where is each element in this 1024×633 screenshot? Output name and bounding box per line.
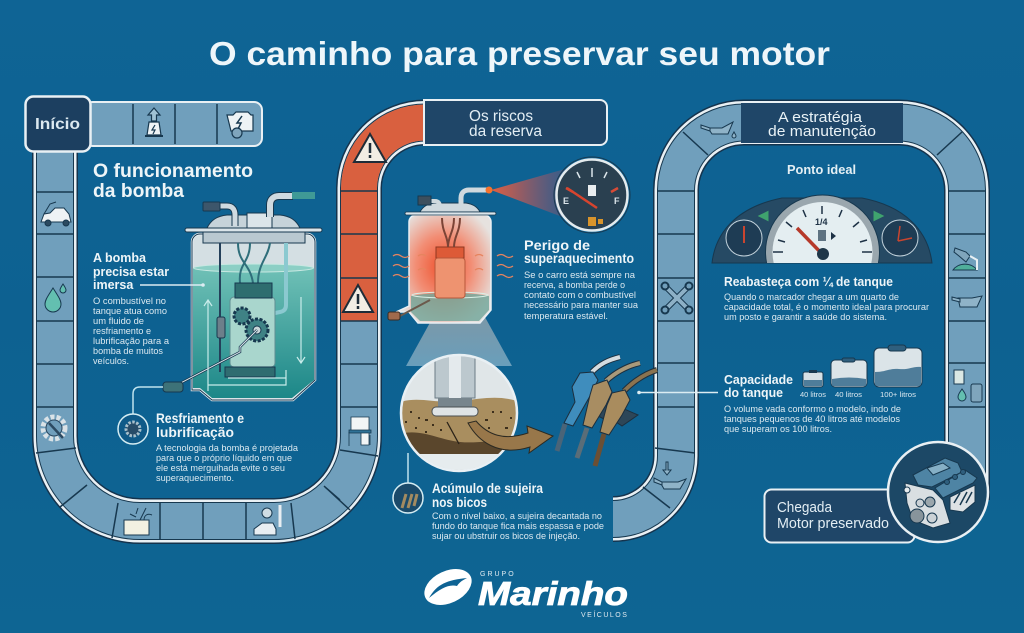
text block: Reabasteça com ¼ de tanque: um posto e garantir a saúde do sistema.	[724, 312, 887, 323]
icon: mechanic	[254, 505, 280, 535]
heading: Ponto ideal: Ponto ideal	[787, 162, 856, 177]
text block: Capacidade do tanque: tanques pequenos de 40 litros até modelos	[724, 414, 900, 425]
icon: fuel nozzles	[557, 357, 657, 466]
text block: Capacidade do tanque: que superam os 100 litros.	[724, 424, 832, 435]
text block: Capacidade do tanque: Capacidade	[724, 372, 793, 387]
text block: A bomba precisa estar imersa: bomba de muitos	[93, 346, 163, 357]
text block: Capacidade do tanque: 40 litros	[835, 392, 863, 399]
text block: Perigo de superaquecimento	[524, 238, 639, 322]
logo: Grupo Marinho Veículos	[419, 562, 628, 619]
text block: Perigo de superaquecimento: Se o carro está sempre na	[524, 270, 636, 281]
icon: oil can with arrow	[654, 462, 686, 489]
logo: Grupo Marinho Veículos: Marinho	[478, 575, 628, 612]
icon: water drops	[45, 284, 66, 312]
text block: A bomba precisa estar imersa: resfriamento e	[93, 326, 151, 337]
callout icon: dirty nozzles	[393, 453, 423, 513]
text block: A bomba precisa estar imersa: lubrificação para a	[93, 336, 170, 347]
icon: warning triangle lower	[343, 285, 373, 312]
text block: A bomba precisa estar imersa: tanque atua como	[93, 306, 167, 317]
icon: gear with wrench	[43, 417, 65, 439]
icon: fuel gauge: F	[614, 196, 620, 206]
text block: Acúmulo de sujeira nos bicos: Acúmulo de sujeira	[432, 481, 543, 496]
icon: nozzle on green dome	[953, 248, 977, 270]
text block: A bomba precisa estar imersa: veículos.	[93, 356, 129, 367]
text block: Reabasteça com ¼ de tanque: Quando o marcador chegar a um quarto de	[724, 292, 899, 303]
header: A estrategia de manutencao	[741, 103, 903, 143]
text block: Resfriamento e lubrificação	[156, 410, 299, 484]
text block: A bomba precisa estar imersa: imersa	[93, 278, 134, 292]
text block: Perigo de superaquecimento: contato com o combustível	[524, 290, 636, 301]
text block: Perigo de superaquecimento: necessário para manter sua	[524, 300, 639, 311]
text block: Capacidade do tanque: O volume vada conformo o modelo, indo de	[724, 404, 901, 415]
icon: fuel gauge	[554, 157, 630, 233]
heading: O funcionamento da bomba	[93, 160, 253, 202]
heading: O funcionamento da bomba: da bomba	[93, 180, 184, 202]
icon: engine gear	[227, 112, 253, 138]
title: O caminho para preservar seu motor	[209, 35, 830, 72]
icon: oil can right	[952, 296, 982, 307]
text block: A bomba precisa estar imersa	[93, 251, 170, 367]
text block: Acúmulo de sujeira nos bicos	[432, 481, 604, 542]
icon: small tank	[803, 370, 823, 387]
icon: warning triangle top	[354, 134, 386, 162]
start badge: Início: Início	[35, 116, 80, 133]
text block: Acúmulo de sujeira nos bicos: fundo do tanque fica mais espassa e pode	[432, 521, 604, 532]
text block: Reabasteça com ¼ de tanque: Reabasteça com ¼ de tanque	[724, 274, 893, 289]
beam: tank to injector circle	[406, 290, 512, 366]
header: Os riscos da reserva: da reserva	[469, 123, 542, 140]
top bar: start strip	[85, 102, 262, 146]
text block: Capacidade do tanque: 40 litros	[800, 392, 827, 399]
text block: Perigo de superaquecimento: superaquecimento	[524, 251, 634, 266]
text block: A bomba precisa estar imersa: A bomba	[93, 251, 147, 265]
icon: pump part	[349, 417, 371, 446]
text block: Resfriamento e lubrificação: Resfriamento e	[156, 410, 244, 426]
icon: fuel gauge: E	[563, 196, 569, 206]
finish badge: Chegada Motor preservado	[764, 490, 914, 542]
illustration: dashboard gauge: 1/4	[815, 217, 828, 227]
arrow: dirt to nozzles	[468, 421, 553, 453]
header: Os riscos da reserva	[424, 100, 607, 145]
start badge: Início	[26, 96, 90, 152]
logo: Grupo Marinho Veículos: VEÍCULOS	[581, 610, 628, 619]
text block: Capacidade do tanque	[724, 372, 917, 435]
callout line: imersa	[140, 283, 205, 287]
text block: Resfriamento e lubrificação: superaquecimento.	[156, 473, 234, 484]
finish badge: Chegada Motor preservado: Chegada	[777, 499, 833, 516]
text block: Acúmulo de sujeira nos bicos: Com o nível baixo, a sujeira decantada no	[432, 511, 602, 522]
icon: folder tank	[124, 508, 152, 535]
text block: Capacidade do tanque: do tanque	[724, 385, 783, 400]
text block: Resfriamento e lubrificação: A tecnologia da bomba é projetada	[156, 443, 299, 454]
beam: tank to fuel gauge	[491, 169, 565, 218]
track: third path	[613, 122, 986, 519]
icon: car with open hood	[41, 202, 71, 226]
callout icon: cooling gear	[118, 387, 163, 444]
header: Os riscos da reserva: Os riscos	[469, 108, 533, 125]
text block: Resfriamento e lubrificação: ele está merguihada evite o seu	[156, 463, 285, 474]
text block: Resfriamento e lubrificação: lubrificação	[156, 424, 234, 440]
text block: Perigo de superaquecimento: recerva, a bomba perde o	[524, 280, 625, 291]
icon: engine circle	[888, 442, 988, 542]
heading: O funcionamento da bomba: O funcionamento	[93, 160, 253, 182]
illustration: overheated pump tank	[388, 186, 513, 323]
text block: A bomba precisa estar imersa: O combustível no	[93, 296, 166, 307]
text block: Perigo de superaquecimento: temperatura estável.	[524, 311, 608, 322]
header: A estrategia de manutencao: de manutenção	[768, 123, 876, 140]
icon: medium tank	[831, 358, 867, 387]
illustration: injector in sediment circle	[400, 350, 520, 475]
icon: fuel pump arrow	[145, 108, 163, 136]
text block: Reabasteça com ¼ de tanque	[724, 274, 929, 323]
header: A estrategia de manutencao: A estratégia	[778, 109, 863, 126]
track: first U path	[36, 122, 470, 539]
text block: Capacidade do tanque: 100+ litros	[880, 392, 917, 399]
icon: crossed wrenches	[662, 282, 692, 314]
illustration: submerged fuel pump tank	[163, 192, 322, 400]
logo: Grupo Marinho Veículos: GRUPO	[480, 571, 516, 578]
illustration: dashboard gauge	[712, 194, 932, 264]
text block: Acúmulo de sujeira nos bicos: sujar ou ubstruir os bicos de injeção.	[432, 531, 580, 542]
icon: fluid bottles	[954, 370, 982, 402]
text block: A bomba precisa estar imersa: um fluido de	[93, 316, 144, 327]
text block: Acúmulo de sujeira nos bicos: nos bicos	[432, 495, 487, 510]
text block: Reabasteça com ¼ de tanque: capacidade total, é o momento ideal para procurar	[724, 302, 929, 313]
icon: large tank	[874, 345, 922, 387]
finish badge: Chegada Motor preservado: Motor preservado	[777, 515, 889, 532]
text block: Resfriamento e lubrificação: para que o próprio líquido em que	[156, 453, 292, 464]
icon: oil can top	[701, 122, 736, 138]
text block: Perigo de superaquecimento: Perigo de	[524, 238, 591, 253]
callout line: capacity	[637, 391, 718, 394]
text block: A bomba precisa estar imersa: precisa estar	[93, 265, 169, 279]
